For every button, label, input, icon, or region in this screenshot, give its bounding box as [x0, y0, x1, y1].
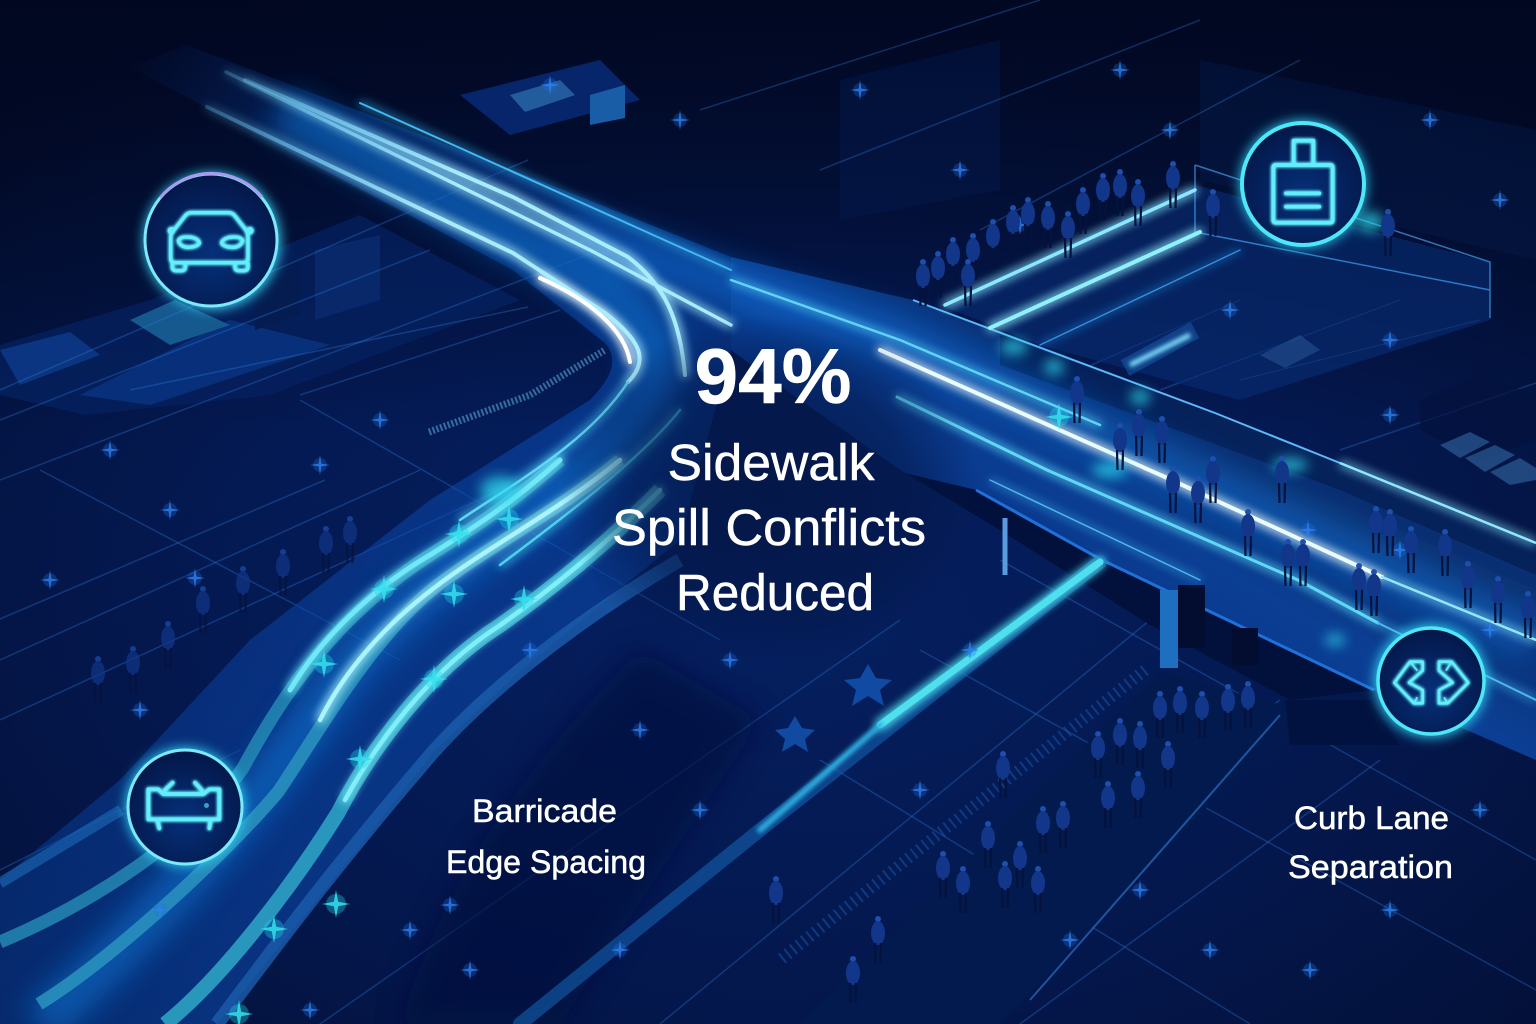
- headline: Sidewalk Spill Conflicts Reduced: [612, 434, 926, 621]
- people on left road: [91, 516, 357, 703]
- label: Curb Lane Separation: [1288, 800, 1453, 885]
- people on upper walkway: [916, 161, 1395, 306]
- branch ramp streaks: [945, 190, 1240, 345]
- curved road light streaks: [207, 72, 731, 800]
- label: Curb Lane Separation: Separation: [1288, 849, 1453, 885]
- icon: suitcase badge: [1240, 121, 1366, 247]
- teal road sparkles: [225, 403, 1073, 1024]
- label: Curb Lane Separation: Curb Lane: [1294, 800, 1449, 836]
- overpass walkway: [1000, 375, 1536, 640]
- curved road wide bands: [0, 460, 680, 1024]
- ramp platform upper right: [940, 165, 1490, 400]
- overpass deck: [731, 257, 1536, 760]
- scattered glints: [480, 212, 1384, 646]
- icon: barricade badge: [126, 748, 244, 866]
- icon: car badge: [144, 173, 280, 309]
- headline: Sidewalk Spill Conflicts Reduced: Spill Conflicts: [612, 499, 926, 556]
- straight crossing road streaks: [731, 280, 1536, 700]
- label: Barricade Edge Spacing: Barricade: [472, 793, 617, 829]
- curved road base: [0, 45, 731, 1024]
- lower plaza: [780, 670, 1400, 1024]
- label: Barricade Edge Spacing: Edge Spacing: [446, 844, 646, 880]
- railing on curved road: [429, 350, 605, 432]
- people on overpass: [1070, 376, 1535, 638]
- lower diagonal light road: [520, 562, 1100, 1024]
- shade behind central text: [560, 315, 980, 665]
- headline: Sidewalk Spill Conflicts Reduced: Sidewalk: [668, 434, 875, 491]
- right side blocks: [1420, 375, 1536, 485]
- people on lower plaza: [769, 681, 1255, 1003]
- buildings: upper left block: [0, 40, 1536, 415]
- label: Barricade Edge Spacing: [446, 793, 646, 880]
- icon: lane arrows badge: [1375, 625, 1487, 737]
- stat: 94%: 94%: [694, 332, 852, 420]
- lower left ground shadow: [400, 650, 760, 1024]
- large floor stars: [775, 664, 892, 752]
- headline: Sidewalk Spill Conflicts Reduced: Reduced: [676, 564, 874, 621]
- overpass piers: [1005, 518, 1258, 668]
